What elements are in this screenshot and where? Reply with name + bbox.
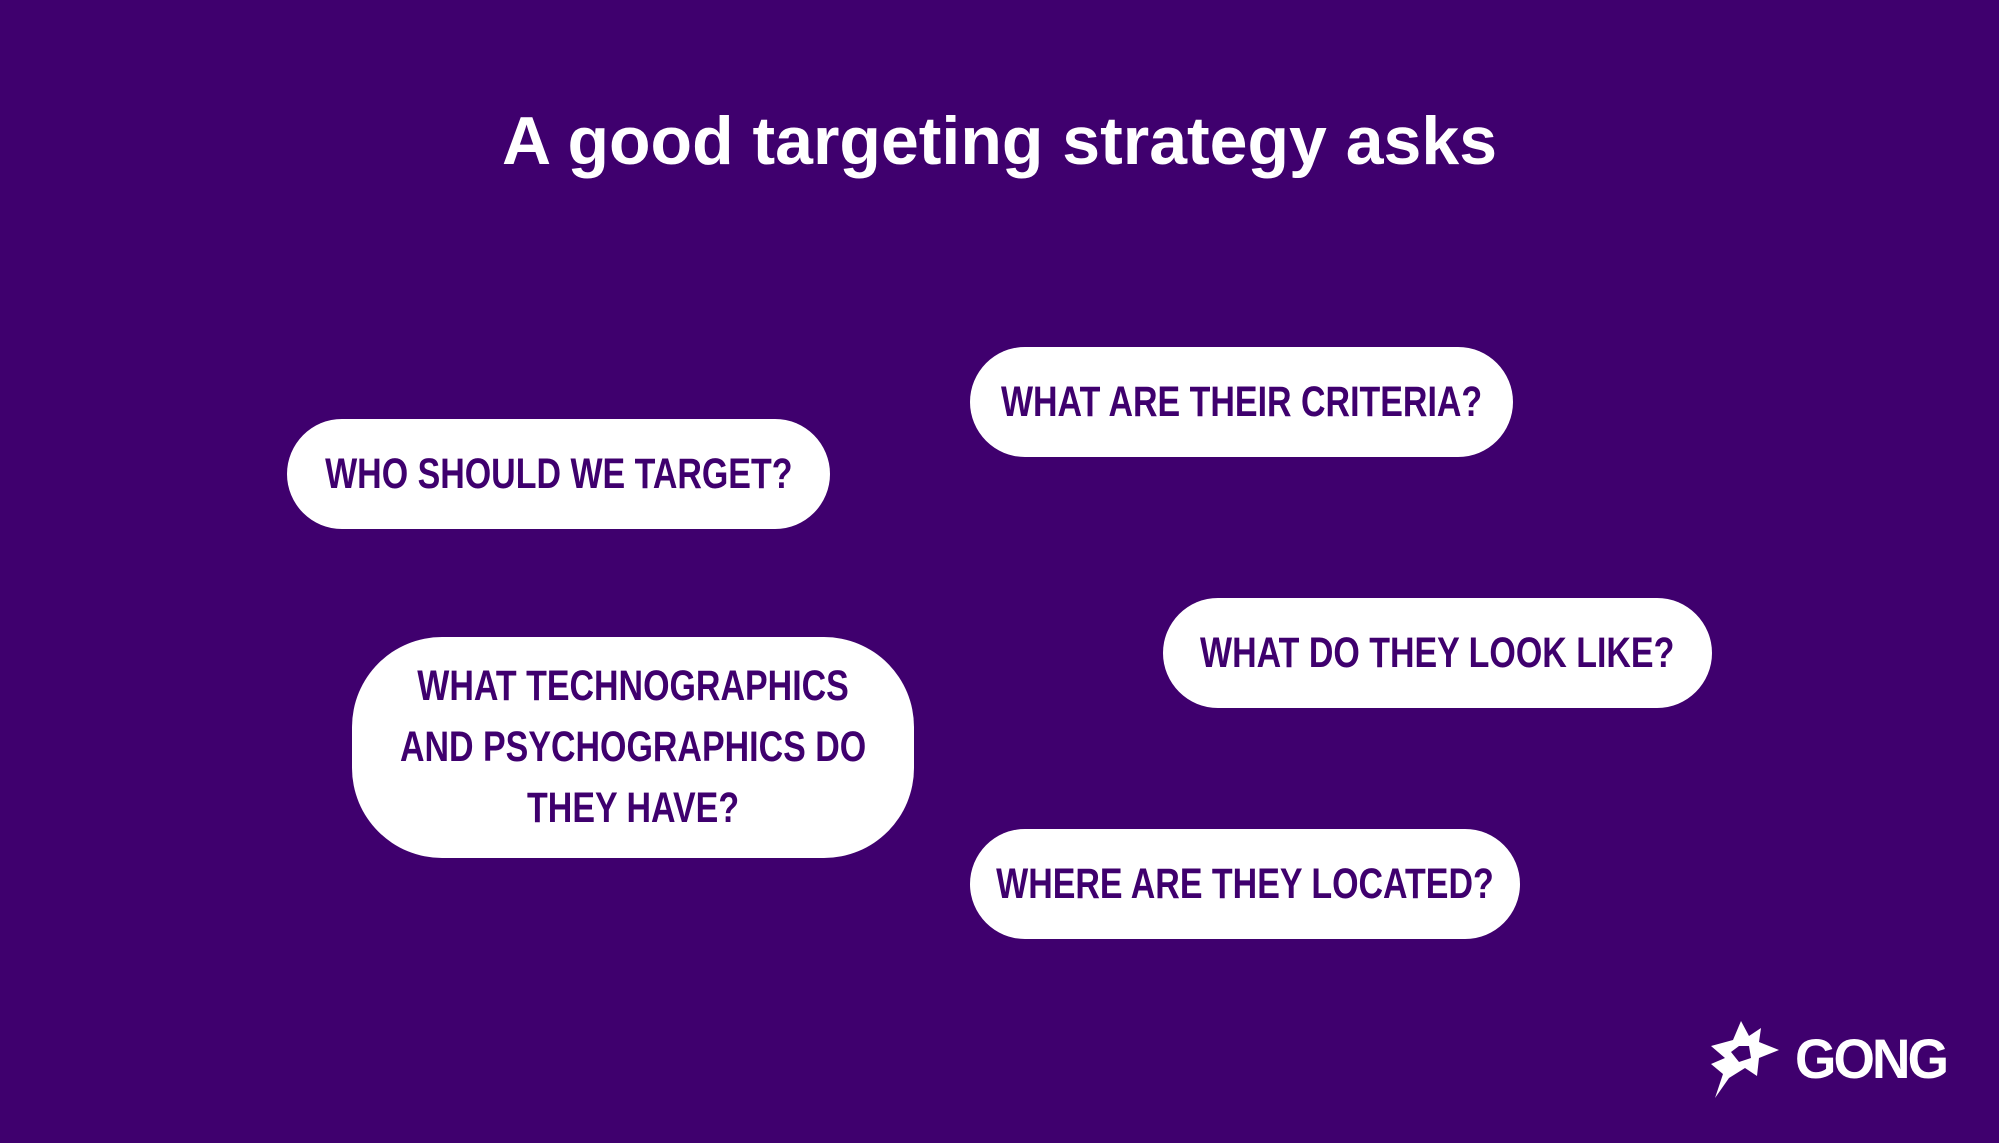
pill: technographics: THEY HAVE? bbox=[527, 784, 739, 832]
pill: who should we target bbox=[287, 419, 830, 529]
pill: look like bbox=[1163, 598, 1712, 708]
pill: who should we target: WHO SHOULD WE TARGET? bbox=[325, 450, 792, 498]
pill: criteria: WHAT ARE THEIR CRITERIA? bbox=[1001, 378, 1482, 426]
pill: criteria bbox=[970, 347, 1513, 457]
icon: starburst bbox=[1711, 1021, 1779, 1098]
pill: location: WHERE ARE THEY LOCATED? bbox=[996, 860, 1494, 908]
pill: technographics: WHAT TECHNOGRAPHICS bbox=[417, 662, 849, 710]
logo text: GONG bbox=[1795, 1027, 1946, 1090]
pill: technographics: AND PSYCHOGRAPHICS DO bbox=[400, 723, 866, 771]
pill: location bbox=[970, 829, 1520, 939]
logo: gong bbox=[1711, 1021, 1946, 1098]
title: A good targeting strategy asks bbox=[502, 103, 1497, 179]
pill: technographics bbox=[352, 637, 914, 858]
pill: look like: WHAT DO THEY LOOK LIKE? bbox=[1200, 628, 1675, 676]
